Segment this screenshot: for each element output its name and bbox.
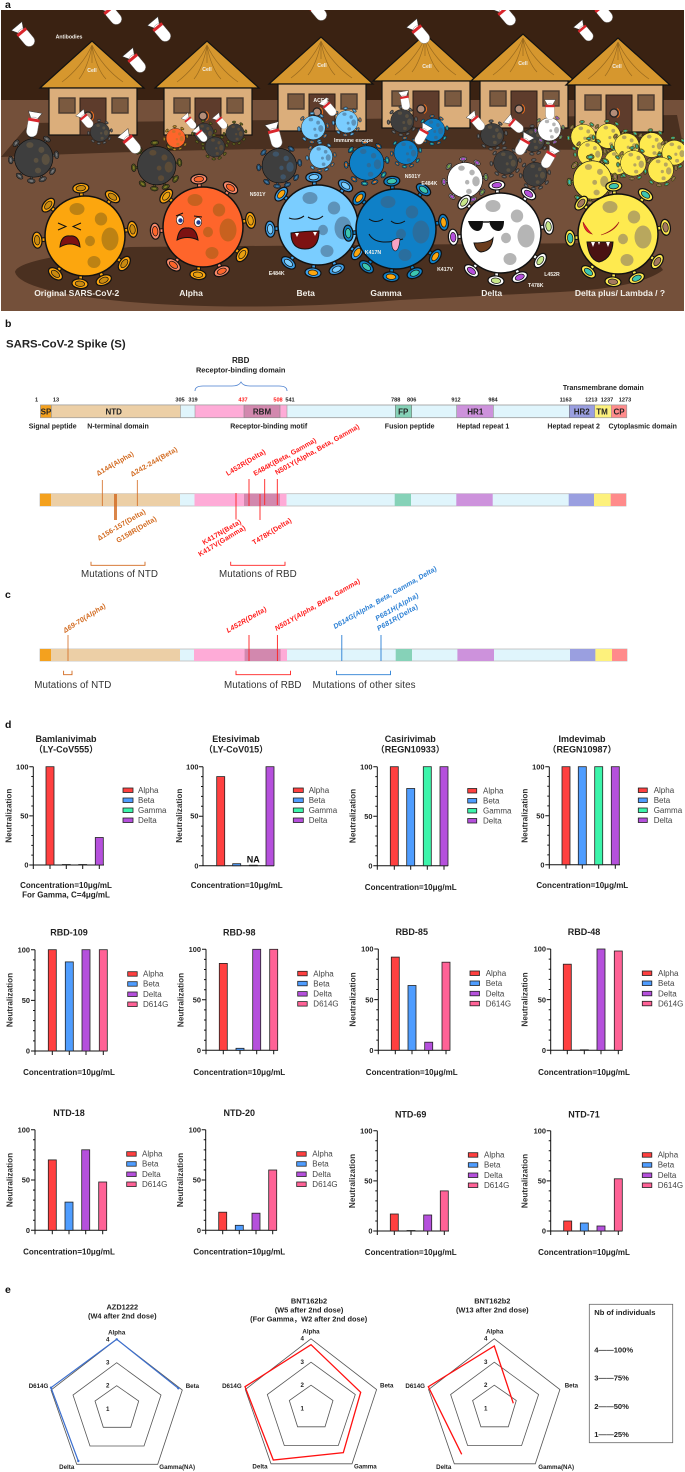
scene text labels: L452R bbox=[544, 272, 560, 278]
chart: Casirivimab: 50 bbox=[364, 812, 372, 821]
residue numbers: 437 bbox=[238, 398, 248, 404]
house cell 5 bbox=[471, 34, 575, 128]
residue numbers: 541 bbox=[285, 398, 295, 404]
chart: NTD-18 bbox=[5, 1108, 167, 1256]
chart: Bamlanivimab: For Gamma, C=4μg/mL bbox=[22, 891, 110, 900]
spike domain map: RBM bbox=[253, 408, 271, 416]
chart: Casirivimab: 100 bbox=[360, 762, 372, 771]
chart: RBD-85: D614G bbox=[486, 999, 511, 1008]
chart: RBD-48: 50 bbox=[538, 995, 546, 1004]
radar: BNT162b2 W5: 2 bbox=[300, 1382, 304, 1389]
spike bar with VOC mutations bbox=[40, 635, 627, 661]
chart: NTD-20: Delta bbox=[312, 1170, 332, 1179]
NTD mutation labels: Δ144(Alpha) bbox=[96, 451, 135, 478]
chart: RBD-109: 50 bbox=[22, 996, 30, 1005]
house cell 4 bbox=[373, 34, 477, 128]
house cell 2 bbox=[155, 41, 259, 135]
bracket: NTD bbox=[34, 671, 111, 691]
scene text labels: Cell bbox=[87, 68, 97, 74]
panel label d: d bbox=[5, 719, 11, 731]
chart: Bamlanivimab: Neutralization bbox=[4, 789, 13, 843]
chart: NTD-69: Concentration=10μg/mL bbox=[365, 1248, 457, 1257]
scene text labels: E484K bbox=[269, 271, 285, 277]
chart: Casirivimab: Delta bbox=[483, 816, 502, 826]
chart: Etesivimab: Concentration=10μg/mL bbox=[191, 881, 283, 890]
radar: BNT162b2 W13 bbox=[405, 1296, 579, 1471]
bracket: mutations of NTD bbox=[81, 562, 158, 580]
chart: NTD-18: 50 bbox=[22, 1176, 30, 1185]
chart: RBD-109: 100 bbox=[18, 945, 30, 954]
chart: NTD-71: 0 bbox=[542, 1227, 546, 1236]
RBD mutation labels: T478K(Delta) bbox=[251, 517, 293, 547]
chart: NTD-20: Beta bbox=[312, 1160, 329, 1169]
chart: RBD-98: Neutralization bbox=[176, 973, 185, 1027]
chart: Etesivimab: Beta bbox=[309, 796, 326, 805]
scene text labels bbox=[34, 34, 665, 298]
scene text labels: K417N bbox=[365, 250, 381, 256]
chart: RBD-98: RBD-98 bbox=[223, 928, 256, 938]
radar: BNT162b2 W13: Beta bbox=[565, 1382, 579, 1390]
chart: RBD-85: Beta bbox=[486, 979, 503, 988]
chart: Bamlanivimab: 100 bbox=[16, 762, 28, 771]
chart: RBD-48: Beta bbox=[658, 979, 675, 988]
spike heading: SARS-CoV-2 Spike (S) bbox=[6, 339, 126, 351]
RBD mutation labels bbox=[197, 424, 361, 558]
chart: NTD-71: Delta bbox=[658, 1171, 677, 1180]
chart: RBD-48: 0 bbox=[542, 1046, 546, 1055]
spike domain map bbox=[40, 405, 627, 418]
chart: Bamlanivimab: Bamlanivimab bbox=[35, 734, 97, 744]
scene text labels: Antibodies bbox=[56, 34, 83, 40]
VOC mutation labels: P681R(Delta) bbox=[376, 603, 420, 633]
chart: RBD-48: Alpha bbox=[658, 969, 679, 978]
chart: Casirivimab: Concentration=10μg/mL bbox=[365, 883, 457, 892]
chart: NTD-20: Neutralization bbox=[176, 1153, 185, 1207]
spike domain map: CP bbox=[613, 408, 625, 416]
domain names: Fusion peptide bbox=[385, 424, 435, 431]
bracket: mutations of NTD: Mutations of NTD bbox=[81, 569, 158, 580]
radar: BNT162b2 W5: 4 bbox=[300, 1336, 304, 1342]
chart: Etesivimab: 0 bbox=[194, 861, 198, 870]
chart: RBD-85: 50 bbox=[365, 995, 374, 1004]
spike domain map: HR1 bbox=[467, 408, 484, 416]
radar: BNT162b2 W13: Delta bbox=[436, 1464, 452, 1471]
spike bar with mutations bbox=[40, 479, 626, 520]
RBD brace label: Receptor-binding domain bbox=[196, 366, 286, 375]
residue numbers: 508 bbox=[273, 398, 283, 404]
radar: BNT162b2 W5: Beta bbox=[380, 1382, 394, 1390]
virus: delta plus / lambda bbox=[565, 181, 671, 287]
radar: BNT162b2 W13: 1 bbox=[484, 1406, 488, 1412]
chart: Bamlanivimab: Delta bbox=[138, 816, 157, 825]
bracket: mutations of RBD bbox=[219, 562, 297, 580]
domain names: Signal peptide bbox=[29, 424, 77, 431]
radar: BNT162b2 W13: 2 bbox=[484, 1382, 488, 1389]
chart: Imdevimab: Imdevimab bbox=[558, 734, 606, 744]
VOC mutation labels: D614G(Alpha, Beta, Gamma, Delta) bbox=[332, 565, 439, 631]
chart: Bamlanivimab: Concentration=10μg/mL bbox=[20, 881, 112, 890]
chart: Imdevimab: Alpha bbox=[654, 786, 675, 795]
chart: RBD-98: D614G bbox=[313, 1000, 339, 1009]
radar: BNT162b2 W5 bbox=[222, 1296, 394, 1470]
chart: Imdevimab bbox=[520, 734, 683, 890]
chart: Casirivimab: Neutralization bbox=[348, 789, 357, 843]
chart: RBD-98: Concentration=10μg/mL bbox=[193, 1068, 285, 1077]
chart: NTD-20: NTD-20 bbox=[224, 1108, 255, 1118]
RBD mutation labels: L452R(Delta) bbox=[225, 449, 267, 478]
chart: Etesivimab bbox=[175, 734, 338, 890]
residue numbers: 1163 bbox=[560, 398, 572, 404]
chart: Casirivimab: Beta bbox=[483, 796, 500, 806]
panel label c: c bbox=[5, 589, 11, 601]
chart: Casirivimab bbox=[348, 734, 512, 892]
RBD mutation labels: K417V(Gamma) bbox=[197, 525, 247, 558]
radar: AZD1222: 4 bbox=[106, 1336, 110, 1344]
scene text labels: N501Y bbox=[405, 174, 421, 180]
chart: RBD-48: 100 bbox=[534, 945, 546, 954]
house cell 6 bbox=[566, 38, 670, 132]
NTD mutation labels: Δ156-157(Delta) bbox=[96, 509, 147, 542]
chart: RBD-48: Concentration=10μg/mL bbox=[538, 1068, 630, 1077]
radar: BNT162b2 W13: BNT162b2 bbox=[474, 1296, 510, 1305]
chart: Imdevimab: 50 bbox=[536, 811, 544, 820]
residue numbers: 1273 bbox=[619, 398, 631, 404]
radar: BNT162b2 W13: Alpha bbox=[486, 1329, 504, 1336]
chart: NTD-71: Concentration=10μg/mL bbox=[538, 1248, 630, 1257]
residue numbers bbox=[35, 398, 631, 404]
scene text labels: Delta bbox=[481, 288, 502, 298]
chart: NTD-18: 100 bbox=[18, 1125, 30, 1134]
bracket: RBD: Mutations of RBD bbox=[224, 680, 302, 691]
scene text labels: Cell bbox=[612, 64, 622, 70]
chart: Bamlanivimab: 0 bbox=[24, 861, 28, 870]
chart: RBD-85: 100 bbox=[361, 945, 374, 954]
chart: NTD-20: D614G bbox=[312, 1180, 338, 1189]
chart: RBD-109: Alpha bbox=[143, 970, 164, 979]
VOC mutation labels: P681H(Alpha) bbox=[374, 592, 421, 623]
chart: RBD-48: RBD-48 bbox=[568, 927, 600, 937]
VOC mutation labels: N501Y(Alpha, Beta, Gamma) bbox=[274, 578, 362, 633]
chart: NTD-20: 50 bbox=[193, 1176, 201, 1185]
chart: NTD-71: Alpha bbox=[658, 1151, 679, 1160]
radar: BNT162b2 W5: (W5 after 2nd dose) bbox=[275, 1305, 344, 1314]
RBD brace label: RBD bbox=[232, 356, 250, 365]
virus: alpha bbox=[150, 174, 256, 280]
panel a: viral escape scene bbox=[1, 0, 685, 311]
scene text labels: E484K bbox=[421, 181, 437, 187]
chart: NTD-18: Beta bbox=[142, 1160, 159, 1169]
legend: number of individuals: Nb of individuals bbox=[594, 1308, 655, 1317]
chart: Bamlanivimab: Alpha bbox=[138, 786, 159, 795]
residue numbers: 806 bbox=[407, 398, 416, 404]
radar: AZD1222 bbox=[29, 1302, 200, 1471]
NTD mutation labels: G158R(Delta) bbox=[115, 516, 158, 545]
virus: gamma bbox=[343, 176, 449, 282]
chart: Bamlanivimab: 50 bbox=[20, 812, 28, 820]
residue numbers: 912 bbox=[451, 398, 461, 404]
domain names: Heptad repeat 1 bbox=[457, 424, 509, 431]
chart: NTD-69: 100 bbox=[360, 1126, 372, 1135]
chart: RBD-109: Neutralization bbox=[5, 973, 14, 1027]
scene text labels: Alpha bbox=[179, 288, 203, 298]
house cell 3 bbox=[269, 37, 373, 131]
chart: Imdevimab: 0 bbox=[540, 860, 544, 869]
chart: Bamlanivimab: （LY-CoV555） bbox=[34, 745, 98, 755]
RBD brace label bbox=[195, 356, 287, 391]
chart: Imdevimab: Gamma bbox=[654, 806, 683, 815]
chart: NTD-69: Neutralization bbox=[348, 1154, 357, 1208]
chart: NTD-18: Alpha bbox=[142, 1150, 163, 1159]
spike domain map: TM bbox=[596, 408, 608, 416]
virus: delta bbox=[448, 180, 554, 286]
chart: Etesivimab: Gamma bbox=[309, 806, 338, 815]
chart: RBD-98: Beta bbox=[313, 979, 330, 988]
radar: AZD1222: (W4 after 2nd dose) bbox=[88, 1311, 157, 1320]
domain names: Transmembrane domain bbox=[563, 385, 644, 392]
antibody bombs bbox=[11, 0, 616, 171]
chart: Etesivimab: Neutralization bbox=[175, 789, 184, 843]
radar: AZD1222: Alpha bbox=[108, 1330, 126, 1337]
residue numbers: 1213 bbox=[585, 398, 598, 404]
chart: Etesivimab: Etesivimab bbox=[212, 734, 260, 744]
chart: NTD-69: Alpha bbox=[484, 1151, 505, 1160]
VOC mutation labels bbox=[62, 565, 439, 635]
bracket: mutations of RBD: Mutations of RBD bbox=[219, 569, 297, 580]
RBD mutation labels: N501Y(Alpha, Beta, Gamma) bbox=[274, 424, 361, 477]
chart: RBD-85: RBD-85 bbox=[395, 927, 428, 937]
chart: NTD-18: Neutralization bbox=[5, 1153, 14, 1207]
chart: Etesivimab: 50 bbox=[190, 812, 198, 820]
domain names: Heptad repeat 2 bbox=[547, 424, 600, 431]
bracket: other sites bbox=[312, 671, 416, 691]
bracket: RBD bbox=[224, 671, 302, 691]
chart: RBD-109: Beta bbox=[143, 980, 160, 989]
chart: NTD-18: D614G bbox=[142, 1180, 167, 1189]
chart: Casirivimab: Alpha bbox=[483, 786, 504, 796]
chart: RBD-98: Alpha bbox=[313, 969, 334, 978]
chart: NTD-69: D614G bbox=[484, 1181, 509, 1190]
domain names bbox=[29, 385, 677, 431]
chart: NTD-20: 0 bbox=[197, 1226, 201, 1235]
residue numbers: 984 bbox=[488, 398, 499, 404]
residue numbers: 319 bbox=[188, 398, 198, 404]
scene text labels: N501Y bbox=[250, 192, 266, 198]
radar: BNT162b2 W5: D614G bbox=[222, 1383, 242, 1390]
chart: RBD-85: Neutralization bbox=[348, 972, 357, 1027]
radar: AZD1222: D614G bbox=[29, 1383, 48, 1390]
chart: RBD-85: Concentration=10μg/mL bbox=[366, 1068, 458, 1077]
radar: BNT162b2 W5: (For Gamma，W2 after 2nd dose) bbox=[250, 1314, 368, 1323]
VOC mutation labels: L452R(Delta) bbox=[226, 606, 269, 635]
chart: NTD-20: Concentration=10μg/mL bbox=[193, 1247, 285, 1256]
spike domain map: FP bbox=[398, 408, 409, 416]
chart: NTD-20: 100 bbox=[189, 1125, 201, 1134]
residue numbers: 1 bbox=[35, 398, 38, 404]
chart: Bamlanivimab: Gamma bbox=[138, 806, 167, 815]
chart: RBD-109: Delta bbox=[143, 990, 162, 999]
spike domain map: HR2 bbox=[574, 408, 590, 416]
radar: AZD1222: Delta bbox=[59, 1464, 75, 1471]
chart: NTD-71: 100 bbox=[534, 1126, 546, 1135]
bracket: NTD: Mutations of NTD bbox=[34, 680, 111, 691]
chart: NTD-69 bbox=[348, 1109, 509, 1257]
chart: Imdevimab: Delta bbox=[654, 816, 673, 825]
scene text labels: Cell bbox=[422, 64, 432, 70]
chart: NTD-20: Alpha bbox=[312, 1150, 333, 1159]
chart: NTD-18: 0 bbox=[26, 1226, 30, 1235]
chart: Imdevimab: Beta bbox=[654, 796, 671, 805]
chart: Imdevimab: 100 bbox=[532, 762, 544, 771]
chart: NTD-20 bbox=[176, 1108, 338, 1256]
chart: NTD-71: D614G bbox=[658, 1181, 683, 1190]
scene text labels: Original SARS-CoV-2 bbox=[34, 288, 119, 298]
chart: RBD-109: RBD-109 bbox=[50, 928, 88, 938]
radar: BNT162b2 W5: Alpha bbox=[302, 1329, 320, 1336]
chart: NTD-71: 50 bbox=[538, 1176, 546, 1186]
residue numbers: 13 bbox=[53, 398, 59, 404]
spike domain map: NTD bbox=[105, 408, 122, 416]
chart: Imdevimab: （REGN10987） bbox=[547, 745, 617, 755]
residue numbers: 305 bbox=[175, 398, 185, 404]
domain names: N-terminal domain bbox=[87, 424, 149, 431]
legend: number of individuals: 3——75% bbox=[594, 1374, 629, 1383]
chart: Etesivimab: NA bbox=[247, 855, 260, 865]
chart: NTD-69: 50 bbox=[364, 1176, 372, 1186]
radar: AZD1222: 3 bbox=[106, 1360, 110, 1366]
chart: NTD-71 bbox=[520, 1109, 683, 1257]
scene text labels: Gamma bbox=[370, 288, 402, 298]
chart: NTD-71: Neutralization bbox=[520, 1154, 529, 1208]
virus: original SARS-CoV-2 bbox=[32, 183, 138, 289]
chart: RBD-109: Concentration=10μg/mL bbox=[23, 1068, 115, 1077]
radar: BNT162b2 W13: (W13 after 2nd dose) bbox=[456, 1305, 529, 1314]
chart: RBD-109: D614G bbox=[143, 1000, 168, 1009]
radar: BNT162b2 W13: 3 bbox=[484, 1359, 488, 1366]
radar: AZD1222: Gamma(NA) bbox=[159, 1464, 195, 1471]
scene text labels: Immune escape bbox=[334, 138, 373, 144]
radar: BNT162b2 W5: 3 bbox=[300, 1359, 304, 1366]
chart: RBD-48 bbox=[520, 927, 683, 1077]
chart: RBD-98: Delta bbox=[313, 990, 333, 999]
residue numbers: 1237 bbox=[601, 398, 613, 404]
RBD mutation labels: E484K(Beta, Gamma) bbox=[253, 437, 318, 478]
chart: Etesivimab: Delta bbox=[309, 816, 328, 825]
chart: RBD-98: 100 bbox=[189, 945, 201, 954]
chart: NTD-71: Beta bbox=[658, 1161, 675, 1170]
legend: number of individuals: 2——50% bbox=[594, 1402, 629, 1411]
virus: beta bbox=[265, 172, 371, 278]
chart: RBD-109 bbox=[5, 928, 168, 1077]
scene text labels: ACE 2 bbox=[313, 98, 329, 104]
radar: BNT162b2 W5: Gamma bbox=[354, 1464, 377, 1470]
chart: Etesivimab: （LY-CoV015） bbox=[204, 745, 268, 755]
panel label b: b bbox=[5, 318, 11, 330]
chart: Casirivimab: 0 bbox=[368, 861, 372, 870]
panel label e: e bbox=[5, 1284, 11, 1296]
scene text labels: T478K bbox=[528, 283, 544, 289]
residue numbers: 788 bbox=[391, 398, 400, 404]
chart: Etesivimab: Alpha bbox=[309, 786, 330, 795]
scene text labels: Cell bbox=[202, 67, 212, 73]
VOC mutation labels: Δ69-70(Alpha) bbox=[62, 603, 108, 635]
neutralized and infecting small virions bbox=[8, 106, 685, 206]
domain names: Cytoplasmic domain bbox=[608, 424, 677, 431]
chart: NTD-69: 0 bbox=[368, 1227, 372, 1236]
radar: BNT162b2 W13: Gamma(NA) bbox=[538, 1464, 574, 1471]
radar: BNT162b2 W5: BNT162b2 bbox=[291, 1296, 327, 1305]
RBD mutation labels: K417N(Beta) bbox=[202, 519, 243, 547]
chart: RBD-85: 0 bbox=[369, 1046, 374, 1055]
chart: RBD-48: D614G bbox=[658, 999, 683, 1008]
scene text labels: Cell bbox=[317, 63, 327, 69]
radar: AZD1222: Beta bbox=[186, 1383, 200, 1390]
radar: BNT162b2 W5: Delta bbox=[252, 1464, 268, 1470]
radar: AZD1222: 1 bbox=[106, 1406, 110, 1413]
chart: RBD-109: 0 bbox=[26, 1047, 30, 1056]
legend: number of individuals: 1——25% bbox=[594, 1430, 629, 1439]
legend: number of individuals bbox=[589, 1304, 673, 1443]
radar: BNT162b2 W5: 1 bbox=[300, 1406, 304, 1412]
chart: NTD-71: NTD-71 bbox=[568, 1109, 600, 1119]
chart: NTD-18: Delta bbox=[142, 1170, 161, 1179]
scene text labels: Delta plus/ Lambda / ? bbox=[575, 288, 665, 298]
chart: RBD-85: Delta bbox=[486, 989, 505, 998]
chart: Casirivimab: Casirivimab bbox=[385, 734, 436, 744]
NTD mutation labels bbox=[96, 446, 179, 545]
scene text labels: Cell bbox=[518, 61, 528, 67]
chart: RBD-48: Neutralization bbox=[520, 972, 529, 1027]
radar: AZD1222: AZD1222 bbox=[106, 1302, 138, 1311]
NTD mutation labels: Δ242-244(Beta) bbox=[130, 446, 179, 478]
chart: Imdevimab: Concentration=10μg/mL bbox=[536, 881, 628, 890]
spike domain map: SP bbox=[41, 408, 52, 416]
chart: Bamlanivimab bbox=[4, 734, 167, 900]
chart: RBD-98: 50 bbox=[193, 995, 201, 1004]
chart: Imdevimab: Neutralization bbox=[520, 789, 529, 843]
chart: RBD-85: Alpha bbox=[486, 969, 507, 978]
chart: Bamlanivimab: Beta bbox=[138, 796, 155, 805]
house cell 1 bbox=[40, 41, 144, 135]
radar: BNT162b2 W13: D614G bbox=[405, 1383, 425, 1390]
chart: NTD-18: Concentration=10μg/mL bbox=[23, 1247, 115, 1256]
chart: NTD-69: NTD-69 bbox=[395, 1109, 426, 1119]
legend: number of individuals: 4——100% bbox=[594, 1346, 633, 1355]
chart: NTD-69: Beta bbox=[484, 1161, 501, 1170]
chart: RBD-85 bbox=[348, 927, 511, 1077]
chart: RBD-98: 0 bbox=[197, 1046, 201, 1055]
bracket: other sites: Mutations of other sites bbox=[312, 680, 416, 691]
chart: Casirivimab: （REGN10933） bbox=[376, 745, 445, 755]
chart: NTD-18: NTD-18 bbox=[53, 1108, 85, 1118]
scene text labels: Beta bbox=[296, 288, 315, 298]
chart: Casirivimab: Gamma bbox=[483, 806, 512, 816]
domain names: Receptor-binding motif bbox=[230, 424, 308, 431]
radar: BNT162b2 W13: 4 bbox=[484, 1336, 488, 1342]
radar: AZD1222: 2 bbox=[106, 1382, 110, 1390]
chart: RBD-98 bbox=[176, 928, 339, 1077]
chart: RBD-48: Delta bbox=[658, 989, 677, 998]
chart: NTD-69: Delta bbox=[484, 1171, 503, 1180]
chart: Etesivimab: 100 bbox=[186, 762, 198, 771]
scene text labels: K417V bbox=[437, 267, 453, 273]
